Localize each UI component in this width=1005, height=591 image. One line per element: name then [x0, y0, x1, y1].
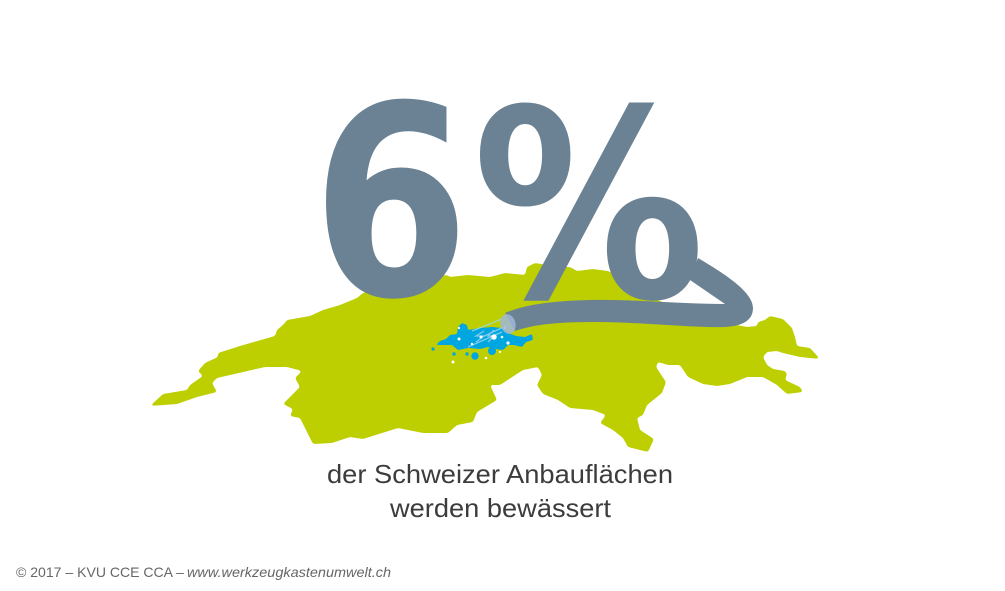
digit 6: 6 [312, 50, 469, 358]
caption [327, 459, 673, 523]
copyright footer [16, 564, 391, 580]
copyright footer: © 2017 – KVU CCE CCA – [16, 564, 184, 580]
hose nozzle [498, 312, 518, 336]
caption: der Schweizer Anbauflächen [327, 459, 673, 489]
map of Switzerland [150, 263, 820, 452]
percent sign: % [472, 55, 705, 359]
icon: water splash [431, 319, 533, 364]
icon: hose [498, 258, 753, 336]
copyright footer: www.werkzeugkastenumwelt.ch [187, 564, 391, 580]
big number: 6% [312, 50, 705, 359]
caption: werden bewässert [389, 493, 612, 523]
